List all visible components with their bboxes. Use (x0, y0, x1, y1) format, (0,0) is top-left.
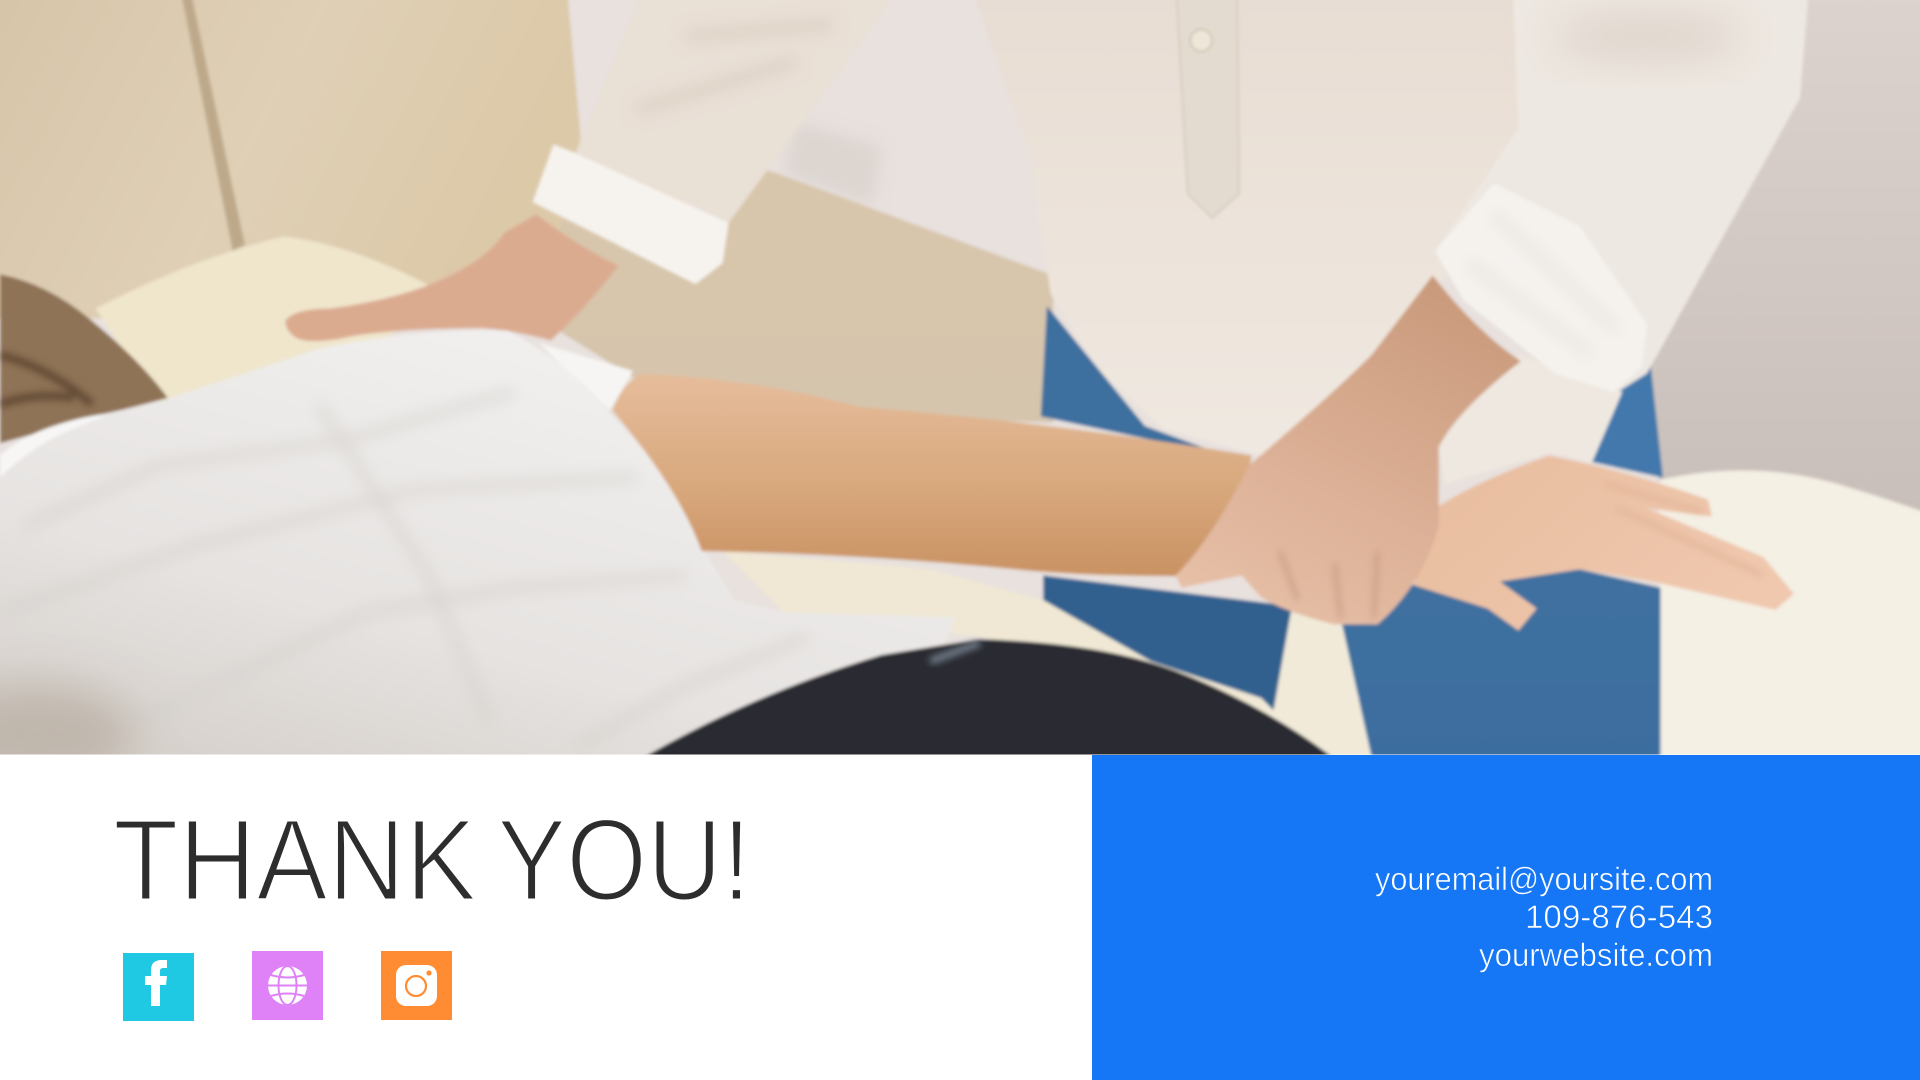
icon: globe (252, 951, 323, 1020)
skirting shadow (788, 128, 878, 199)
blue contact panel (1092, 755, 1920, 1080)
patient sleeve (539, 343, 633, 410)
right wall (1641, 0, 1920, 520)
email: youremail@yoursite.com (1375, 861, 1713, 897)
white wall backdrop (0, 286, 1659, 679)
patient arm (612, 373, 1251, 576)
phone: 109-876-543 (1525, 899, 1713, 935)
therapist forearm and hand gripping wrist (1176, 276, 1521, 624)
icon: facebook (123, 953, 194, 1021)
jeans (1041, 306, 1663, 784)
lower bench cushion (728, 552, 1261, 710)
icon: instagram (381, 951, 452, 1020)
button placket (1176, 0, 1239, 218)
therapist left sleeve and cuff (532, 4, 846, 286)
title (113, 795, 751, 925)
patient hand (1414, 456, 1794, 631)
therapist right sleeve (1435, 0, 1810, 394)
left bench cushion (96, 236, 441, 404)
patient hair (0, 274, 168, 443)
word: YOU!: YOU! (497, 795, 751, 925)
website: yourwebsite.com (1479, 937, 1713, 973)
photo: massage therapist stretching a patient's arm (0, 0, 1920, 784)
patient shirt (0, 330, 955, 784)
shirt shadows and wrinkles (0, 392, 808, 784)
collar (0, 415, 101, 476)
right bench cushion (1659, 470, 1920, 784)
contact details (1375, 861, 1713, 973)
therapist hand on back (285, 214, 618, 341)
therapist shirt lower hem (1577, 389, 1625, 464)
patient trousers (646, 636, 1332, 754)
therapist shirt body (978, 0, 1513, 296)
wooden floor (560, 170, 1054, 424)
wooden wall (0, 0, 580, 318)
word: THANK: THANK (113, 795, 477, 925)
